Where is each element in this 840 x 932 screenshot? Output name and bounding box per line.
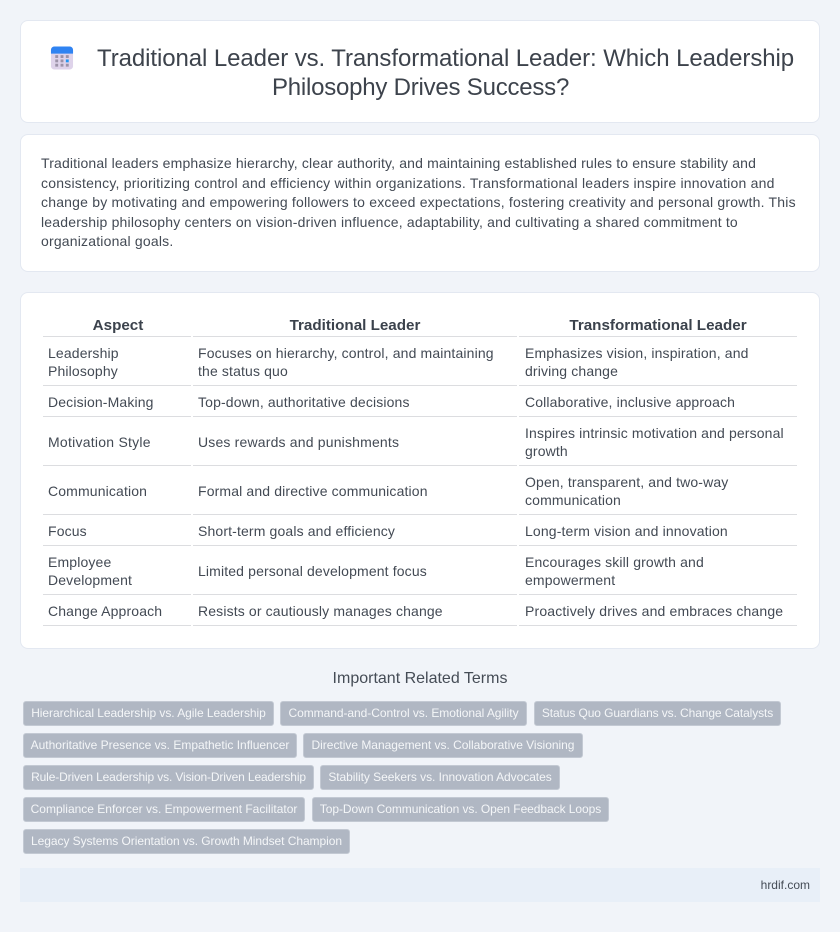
- tag list: Rule-Driven Leadership vs. Vision-Driven Leadership: [31, 770, 306, 784]
- row: leadership philosophy: driving change: [525, 363, 618, 379]
- header: transformational: Transformational Leader: [569, 317, 747, 334]
- row: leadership philosophy: [48, 345, 749, 379]
- title: Traditional Leader vs. Transformational Leader: Which Leadership: [97, 45, 794, 72]
- intro text: [41, 155, 796, 249]
- panel: header card: [20, 20, 820, 123]
- heading: related terms: Important Related Terms: [333, 670, 507, 687]
- row: decision-making: Top-down, authoritative decisions: [198, 394, 410, 410]
- row: change approach: Resists or cautiously manages change: [198, 603, 443, 619]
- intro text: change by motivating and empowering followers to exceed expectations, fostering creativity and personal growth. This: [41, 194, 796, 210]
- table headers: Aspect: [93, 317, 143, 334]
- row: employee development: Limited personal development focus: [198, 563, 427, 579]
- tag list: Top-Down Communication vs. Open Feedback Loops: [320, 802, 601, 816]
- title: Philosophy Drives Success?: [272, 74, 569, 101]
- row: employee development: [48, 554, 704, 588]
- tag list: Stability Seekers vs. Innovation Advocates: [328, 770, 552, 784]
- row: decision-making: [48, 394, 735, 410]
- row: leadership philosophy: Leadership: [48, 345, 119, 361]
- row: employee development: Employee: [48, 554, 111, 570]
- icon: calendar: [50, 46, 74, 70]
- row: focus: Short-term goals and efficiency: [198, 523, 395, 539]
- tag list: Status Quo Guardians vs. Change Catalysts: [542, 706, 773, 720]
- tag list: [23, 701, 781, 854]
- row: employee development: empowerment: [525, 572, 615, 588]
- panel: intro card: [20, 134, 820, 272]
- column 2 rules: [193, 336, 517, 626]
- row: focus: [48, 523, 728, 539]
- intro text: organizational goals.: [41, 233, 173, 249]
- row: change approach: Change Approach: [48, 603, 162, 619]
- footer bar: [20, 868, 820, 902]
- row: change approach: [48, 603, 783, 619]
- row: motivation style: Inspires intrinsic motivation and personal: [525, 425, 784, 441]
- tag list: Command-and-Control vs. Emotional Agility: [288, 706, 519, 720]
- row: decision-making: Collaborative, inclusive approach: [525, 394, 735, 410]
- footer source: hrdif.com: [761, 878, 810, 892]
- row: communication: Formal and directive communication: [198, 483, 428, 499]
- intro text: consistency, prioritizing control and efficiency within organizations. Transformational leaders inspire innovation and: [41, 175, 775, 191]
- tag list: Legacy Systems Orientation vs. Growth Mindset Champion: [31, 834, 342, 848]
- row: employee development: Encourages skill growth and: [525, 554, 704, 570]
- row: change approach: Proactively drives and embraces change: [525, 603, 783, 619]
- row: communication: communication: [525, 492, 621, 508]
- row: leadership philosophy: Focuses on hierarchy, control, and maintaining: [198, 345, 494, 361]
- row: leadership philosophy: Philosophy: [48, 363, 118, 379]
- row: employee development: Development: [48, 572, 132, 588]
- tag list: Compliance Enforcer vs. Empowerment Facilitator: [31, 802, 297, 816]
- intro text: Traditional leaders emphasize hierarchy, clear authority, and maintaining established rules to ensure stability and: [41, 155, 756, 171]
- row: communication: Communication: [48, 483, 147, 499]
- row: decision-making: Decision-Making: [48, 394, 154, 410]
- header: traditional: Traditional Leader: [290, 317, 420, 334]
- row: communication: [48, 474, 728, 508]
- row: motivation style: [48, 425, 784, 459]
- tag list: Authoritative Presence vs. Empathetic Influencer: [31, 738, 289, 752]
- intro text: leadership philosophy centers on vision-driven influence, adaptability, and cultivating a shared commitment to: [41, 214, 738, 230]
- row: motivation style: growth: [525, 443, 568, 459]
- row: communication: Open, transparent, and two-way: [525, 474, 728, 490]
- column 1 rules: [43, 336, 191, 626]
- row: leadership philosophy: the status quo: [198, 363, 288, 379]
- row: motivation style: Uses rewards and punishments: [198, 434, 399, 450]
- tag list: Hierarchical Leadership vs. Agile Leadership: [31, 706, 266, 720]
- row: leadership philosophy: Emphasizes vision, inspiration, and: [525, 345, 749, 361]
- row: motivation style: Motivation Style: [48, 434, 151, 450]
- column 3 rules: [519, 336, 797, 626]
- panel: comparison table: [20, 292, 820, 649]
- row: focus: Focus: [48, 523, 87, 539]
- title: [97, 45, 794, 101]
- row: focus: Long-term vision and innovation: [525, 523, 728, 539]
- tag list: Directive Management vs. Collaborative Visioning: [312, 738, 574, 752]
